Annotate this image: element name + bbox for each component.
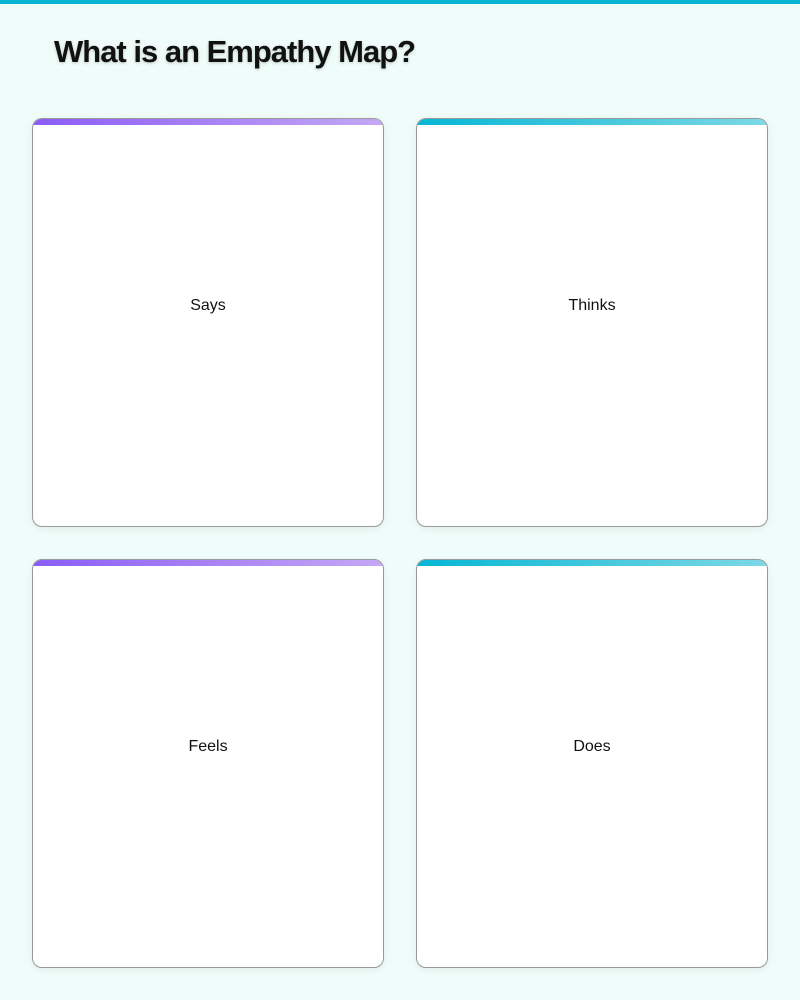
top accent bar [0,0,800,4]
label: thinks: Thinks [568,297,616,314]
accent strip: thinks [417,119,767,125]
accent strip: says [33,119,383,125]
panel: does [416,559,768,968]
title: What is an Empathy Map? [54,34,415,69]
accent strip: does [417,560,767,566]
label: feels: Feels [188,738,228,755]
accent strip: feels [33,560,383,566]
panel: says [32,118,384,527]
label: says: Says [190,297,226,314]
panel: feels [32,559,384,968]
label: does: Does [573,738,611,755]
panel: thinks [416,118,768,527]
